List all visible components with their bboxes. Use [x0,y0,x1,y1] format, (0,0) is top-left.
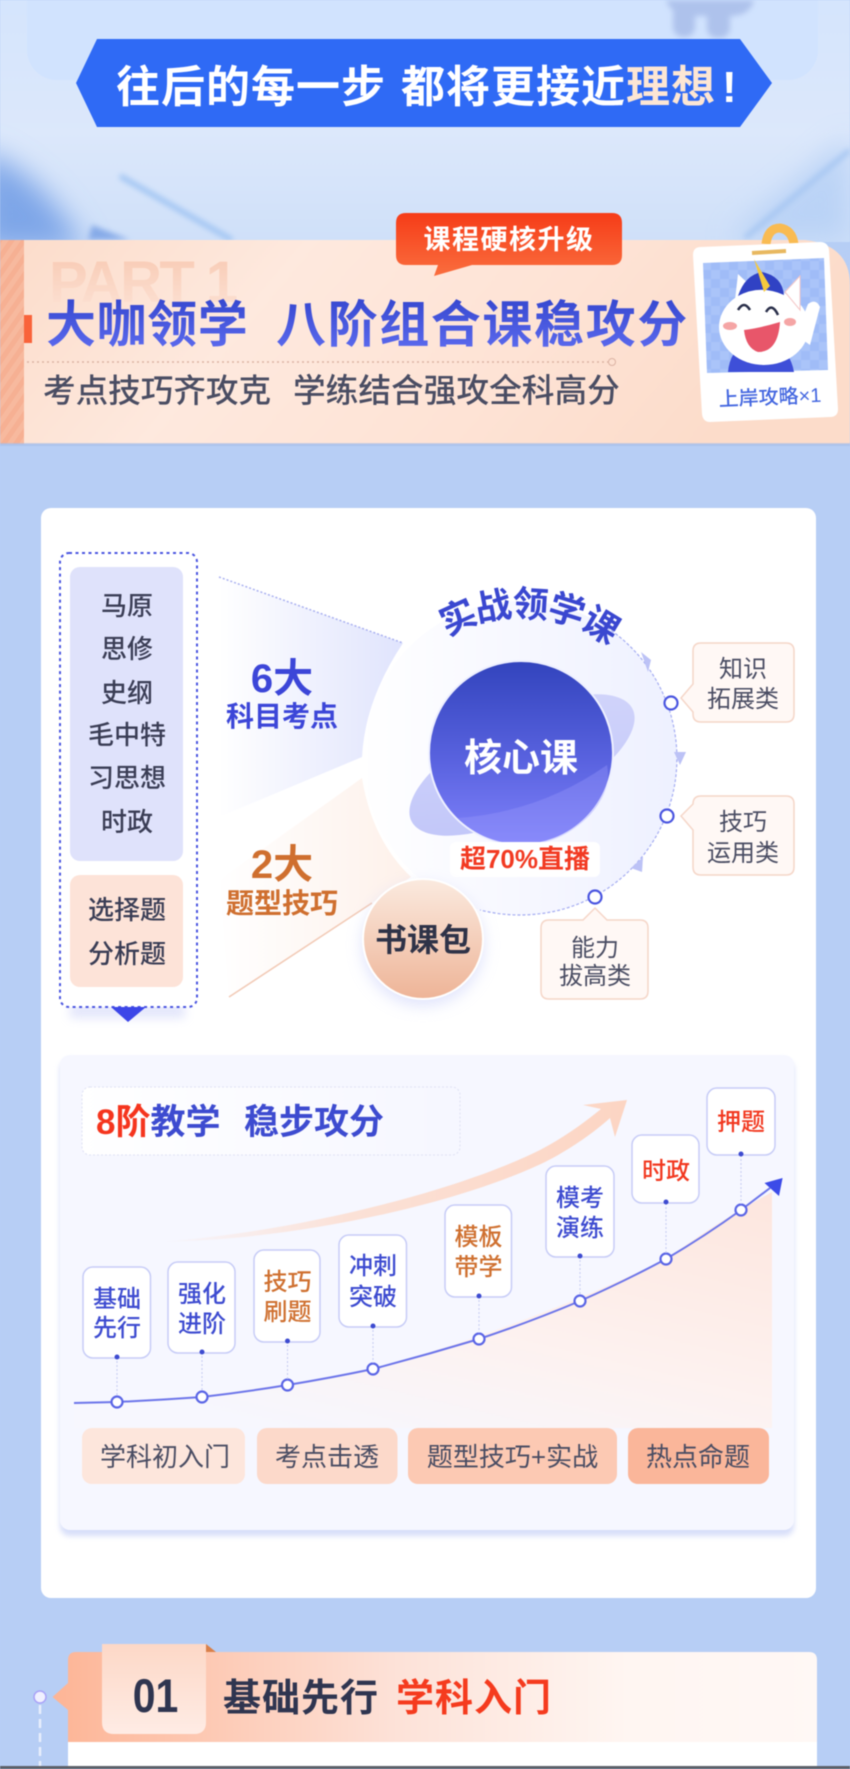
step 1: 基础 [93,1286,141,1313]
subject list: political subjects: 时政 [101,807,153,837]
sticker card [693,228,838,422]
live badge: 超70%直播 [460,844,590,874]
text: six major subjects: 6大 [251,657,313,701]
part 1 strip [0,240,850,446]
stage pill: key points: 考点击透 [275,1442,379,1472]
subject list: question types [70,875,183,987]
step 6: 模考 [556,1185,604,1212]
title banner: 往后的每一步 [116,63,386,112]
mascot feet behind banner [666,0,754,38]
step connectors [117,1155,741,1396]
section title [223,1678,552,1720]
step 1 [83,1267,150,1360]
callout: skills: 运用类 [707,840,779,867]
callout: ability: 拔高类 [559,963,631,990]
arc label: 领 [511,583,550,626]
step 5: 带学 [454,1254,502,1281]
text: two major skills: 2大 [251,843,313,887]
panel shadow [70,1004,185,1018]
big ring [363,601,686,915]
title banner: ! [722,63,737,112]
arc label: 战 [472,583,515,630]
sticker card: 上岸攻略×1 [718,384,822,411]
dotted rule [27,358,616,366]
step 2: 强化 [178,1281,226,1308]
panel: eight-step teaching [60,1055,794,1536]
subject list: question types: 分析题 [88,939,166,969]
callout: knowledge: 知识 [719,656,767,683]
stage pill: hot topics [628,1428,769,1484]
step 4: 冲刺 [349,1253,397,1280]
subject list: political subjects: 马原 [101,591,153,621]
shaded growth area [74,1192,772,1428]
step 6 [546,1166,614,1258]
bottom edge line [0,1766,850,1769]
book bundle [363,879,483,1005]
step heading [82,1087,460,1155]
step 4: 突破 [349,1284,397,1311]
callout: skills [681,796,794,875]
title banner: 都将更接近理想 [401,63,716,112]
callout: knowledge: 拓展类 [707,686,779,713]
text: two major skills [226,843,338,919]
section number tab: 01 [133,1670,178,1723]
timeline marker [34,1691,46,1766]
core course planet [390,661,654,864]
step 8: 押题 [717,1109,765,1136]
header background [0,0,850,250]
step 5: 模板 [454,1224,502,1251]
subject list: political subjects: 毛中特 [88,720,166,750]
stage pill: key points [257,1428,398,1484]
part title [46,297,689,353]
step 1: 先行 [93,1315,141,1342]
stage pill: hot topics: 热点命题 [646,1442,750,1472]
step 2: 进阶 [178,1311,226,1338]
book bundle: 书课包 [375,922,471,958]
rising arrow [158,1100,627,1242]
part title: 八阶组合课稳攻分 [276,297,689,353]
text: two major skills: 题型技巧 [226,888,338,919]
step 2 [168,1262,235,1354]
down arrow [111,1007,146,1022]
wedge: six subjects [219,577,403,817]
white content card [41,508,816,1598]
callout: knowledge [681,643,794,722]
step 5 [445,1205,512,1298]
arc label [433,583,627,652]
icon: mascot [719,259,820,372]
orange title tick [24,315,32,343]
stage pill: beginner [82,1428,245,1484]
node markers [588,696,678,904]
step 4 [339,1235,406,1328]
step 7: 时政 [642,1158,690,1185]
subject list: political subjects: 史纲 [101,678,153,708]
part subtitle: 学练结合强攻全科高分 [293,372,620,409]
section 01 card [52,1644,817,1769]
part 1 ghost label: PART 1 [49,250,238,315]
subject list: political subjects [70,567,183,861]
step 3: 刷题 [264,1299,312,1326]
subject list: political subjects: 习思想 [88,763,166,793]
step 3 [254,1250,320,1344]
part title: 大咖领学 [46,297,248,353]
part subtitle: 考点技巧齐攻克 [43,372,271,409]
stage pill: skills: 题型技巧+实战 [427,1442,598,1472]
arc label: 学 [544,586,590,635]
stage pill: skills [408,1428,617,1484]
speech bubble: 课程硬核升级 [424,225,594,255]
arc label: 实 [433,591,483,644]
stage pill: beginner: 学科初入门 [100,1442,230,1472]
panel: subject list [60,553,197,1007]
step 6: 演练 [556,1215,604,1242]
text: six major subjects [226,657,338,732]
title banner [76,39,772,127]
step heading: 8阶教学 [96,1103,220,1142]
wedge: two skills [219,778,411,997]
growth curve [74,1178,783,1408]
section number tab [102,1644,206,1734]
section title: 学科入门 [396,1678,552,1720]
step 3: 技巧 [264,1269,312,1296]
callout: ability: 能力 [571,935,619,962]
text: six major subjects: 科目考点 [226,701,338,732]
callout: skills: 技巧 [719,809,767,836]
section title: 基础先行 [223,1678,379,1720]
subject list: political subjects: 思修 [101,634,153,664]
step 7 [632,1135,699,1204]
step 8 [707,1088,775,1156]
step heading: 稳步攻分 [244,1103,384,1142]
part subtitle [43,372,620,409]
speech bubble [396,213,622,276]
callout: ability [541,908,648,999]
subject list: question types: 选择题 [88,895,166,925]
core course planet: 核心课 [464,738,578,780]
arc label: 课 [575,599,627,652]
